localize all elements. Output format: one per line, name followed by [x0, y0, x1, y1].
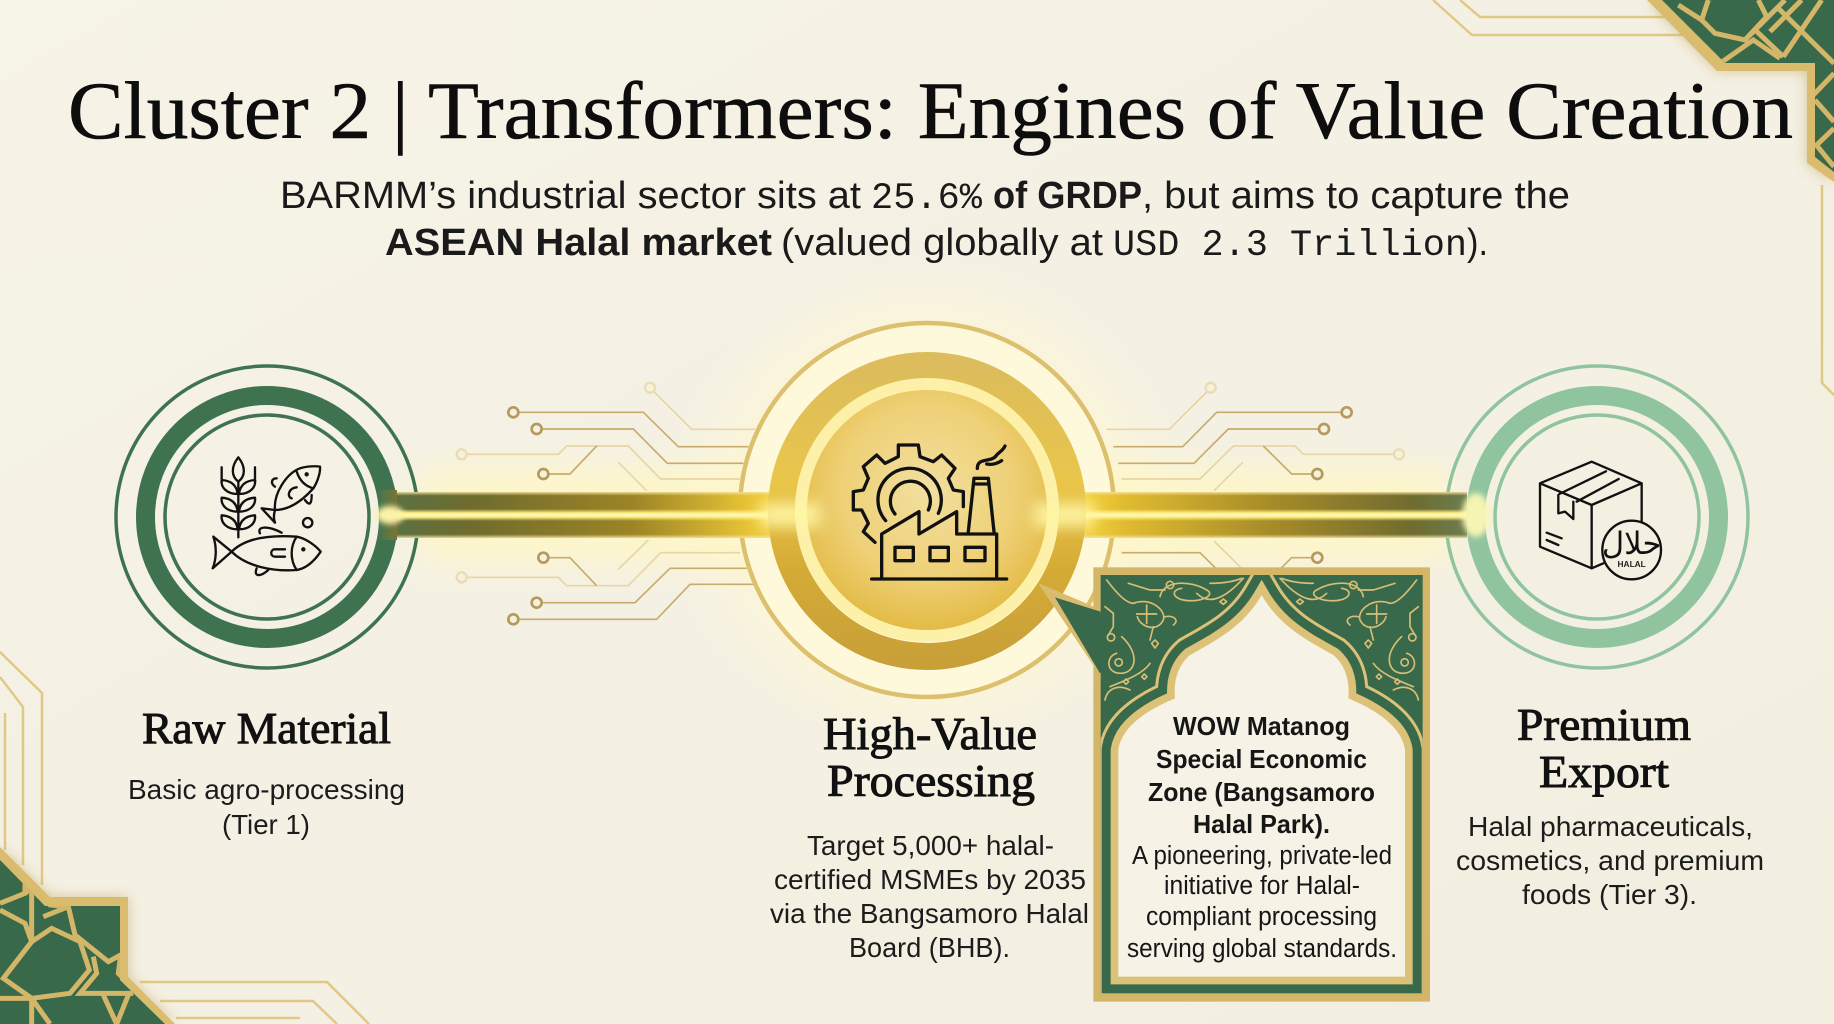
- node: raw material rings: [116, 366, 418, 668]
- title: Cluster 2 | Transformers: Engines of Value Creation: [68, 65, 1793, 156]
- background glow: [420, 255, 1450, 765]
- stage: premium export: cosmetics, and premium: [1456, 845, 1764, 876]
- subtitle: [280, 175, 1570, 267]
- icon: box with halal badge: حلال: [1602, 527, 1661, 562]
- callout text: WOW Matanog: [1173, 711, 1350, 741]
- callout text: Halal Park).: [1193, 809, 1330, 839]
- stage: raw material: [128, 704, 405, 840]
- callout text: Zone (Bangsamoro: [1148, 777, 1375, 807]
- node: high-value processing disc: [760, 366, 1094, 656]
- stage: premium export: Export: [1539, 746, 1669, 797]
- stage: premium export: [1456, 699, 1764, 910]
- icon: box with halal badge: [1540, 462, 1661, 579]
- circuit traces: right of centre: [1107, 383, 1404, 586]
- beam connector: [376, 490, 1490, 540]
- filigree: [1105, 578, 1418, 700]
- stage: high-value processing: High-Value: [823, 708, 1037, 759]
- callout card: WOW Matanog: [1038, 567, 1430, 1002]
- icon: box with halal badge: HALAL: [1618, 559, 1646, 569]
- stage: premium export: Halal pharmaceuticals,: [1468, 811, 1753, 842]
- callout text: compliant processing: [1146, 903, 1377, 931]
- subtitle: ).: [1467, 222, 1488, 264]
- icon: gear and factory: [853, 445, 1007, 579]
- stage: premium export: foods (Tier 3).: [1522, 879, 1697, 910]
- subtitle: (valued globally at: [781, 222, 1103, 264]
- callout text: [1127, 711, 1397, 963]
- stage: high-value processing: Target 5,000+ halal-: [807, 830, 1054, 861]
- stage: raw material: Basic agro-processing: [128, 774, 405, 805]
- subtitle: ASEAN Halal market: [385, 222, 772, 264]
- icon: wheat and fish: [213, 457, 321, 575]
- stage: raw material: (Tier 1): [222, 809, 310, 840]
- stage: premium export: Premium: [1517, 699, 1691, 750]
- callout text: initiative for Halal-: [1164, 872, 1360, 900]
- subtitle: USD 2.3 Trillion: [1113, 225, 1467, 267]
- callout text: serving global standards.: [1127, 935, 1397, 963]
- decoration: top-right corner lattice: [1433, 0, 1834, 395]
- stage: high-value processing: via the Bangsamoro Halal: [770, 898, 1089, 929]
- callout text: A pioneering, private-led: [1132, 842, 1392, 870]
- arch frame: [1038, 567, 1430, 1002]
- stage: raw material: Raw Material: [142, 704, 391, 753]
- subtitle: of GRDP: [993, 175, 1142, 217]
- decoration: bottom-left corner lattice: [0, 652, 369, 1024]
- callout pointer: [1038, 583, 1103, 680]
- subtitle: BARMM’s industrial sector sits at: [280, 175, 861, 217]
- callout text: Special Economic: [1156, 744, 1367, 774]
- node: premium export rings: [1446, 366, 1748, 668]
- stage: high-value processing: [770, 708, 1089, 963]
- subtitle: 25.6%: [871, 178, 983, 220]
- stage: high-value processing: Processing: [827, 755, 1035, 806]
- stage: high-value processing: Board (BHB).: [849, 932, 1010, 963]
- subtitle: , but aims to capture the: [1142, 175, 1570, 217]
- circuit traces: left of centre: [457, 383, 755, 624]
- node: high-value outer ring: [740, 323, 1114, 697]
- stage: high-value processing: certified MSMEs by 2035: [774, 864, 1086, 895]
